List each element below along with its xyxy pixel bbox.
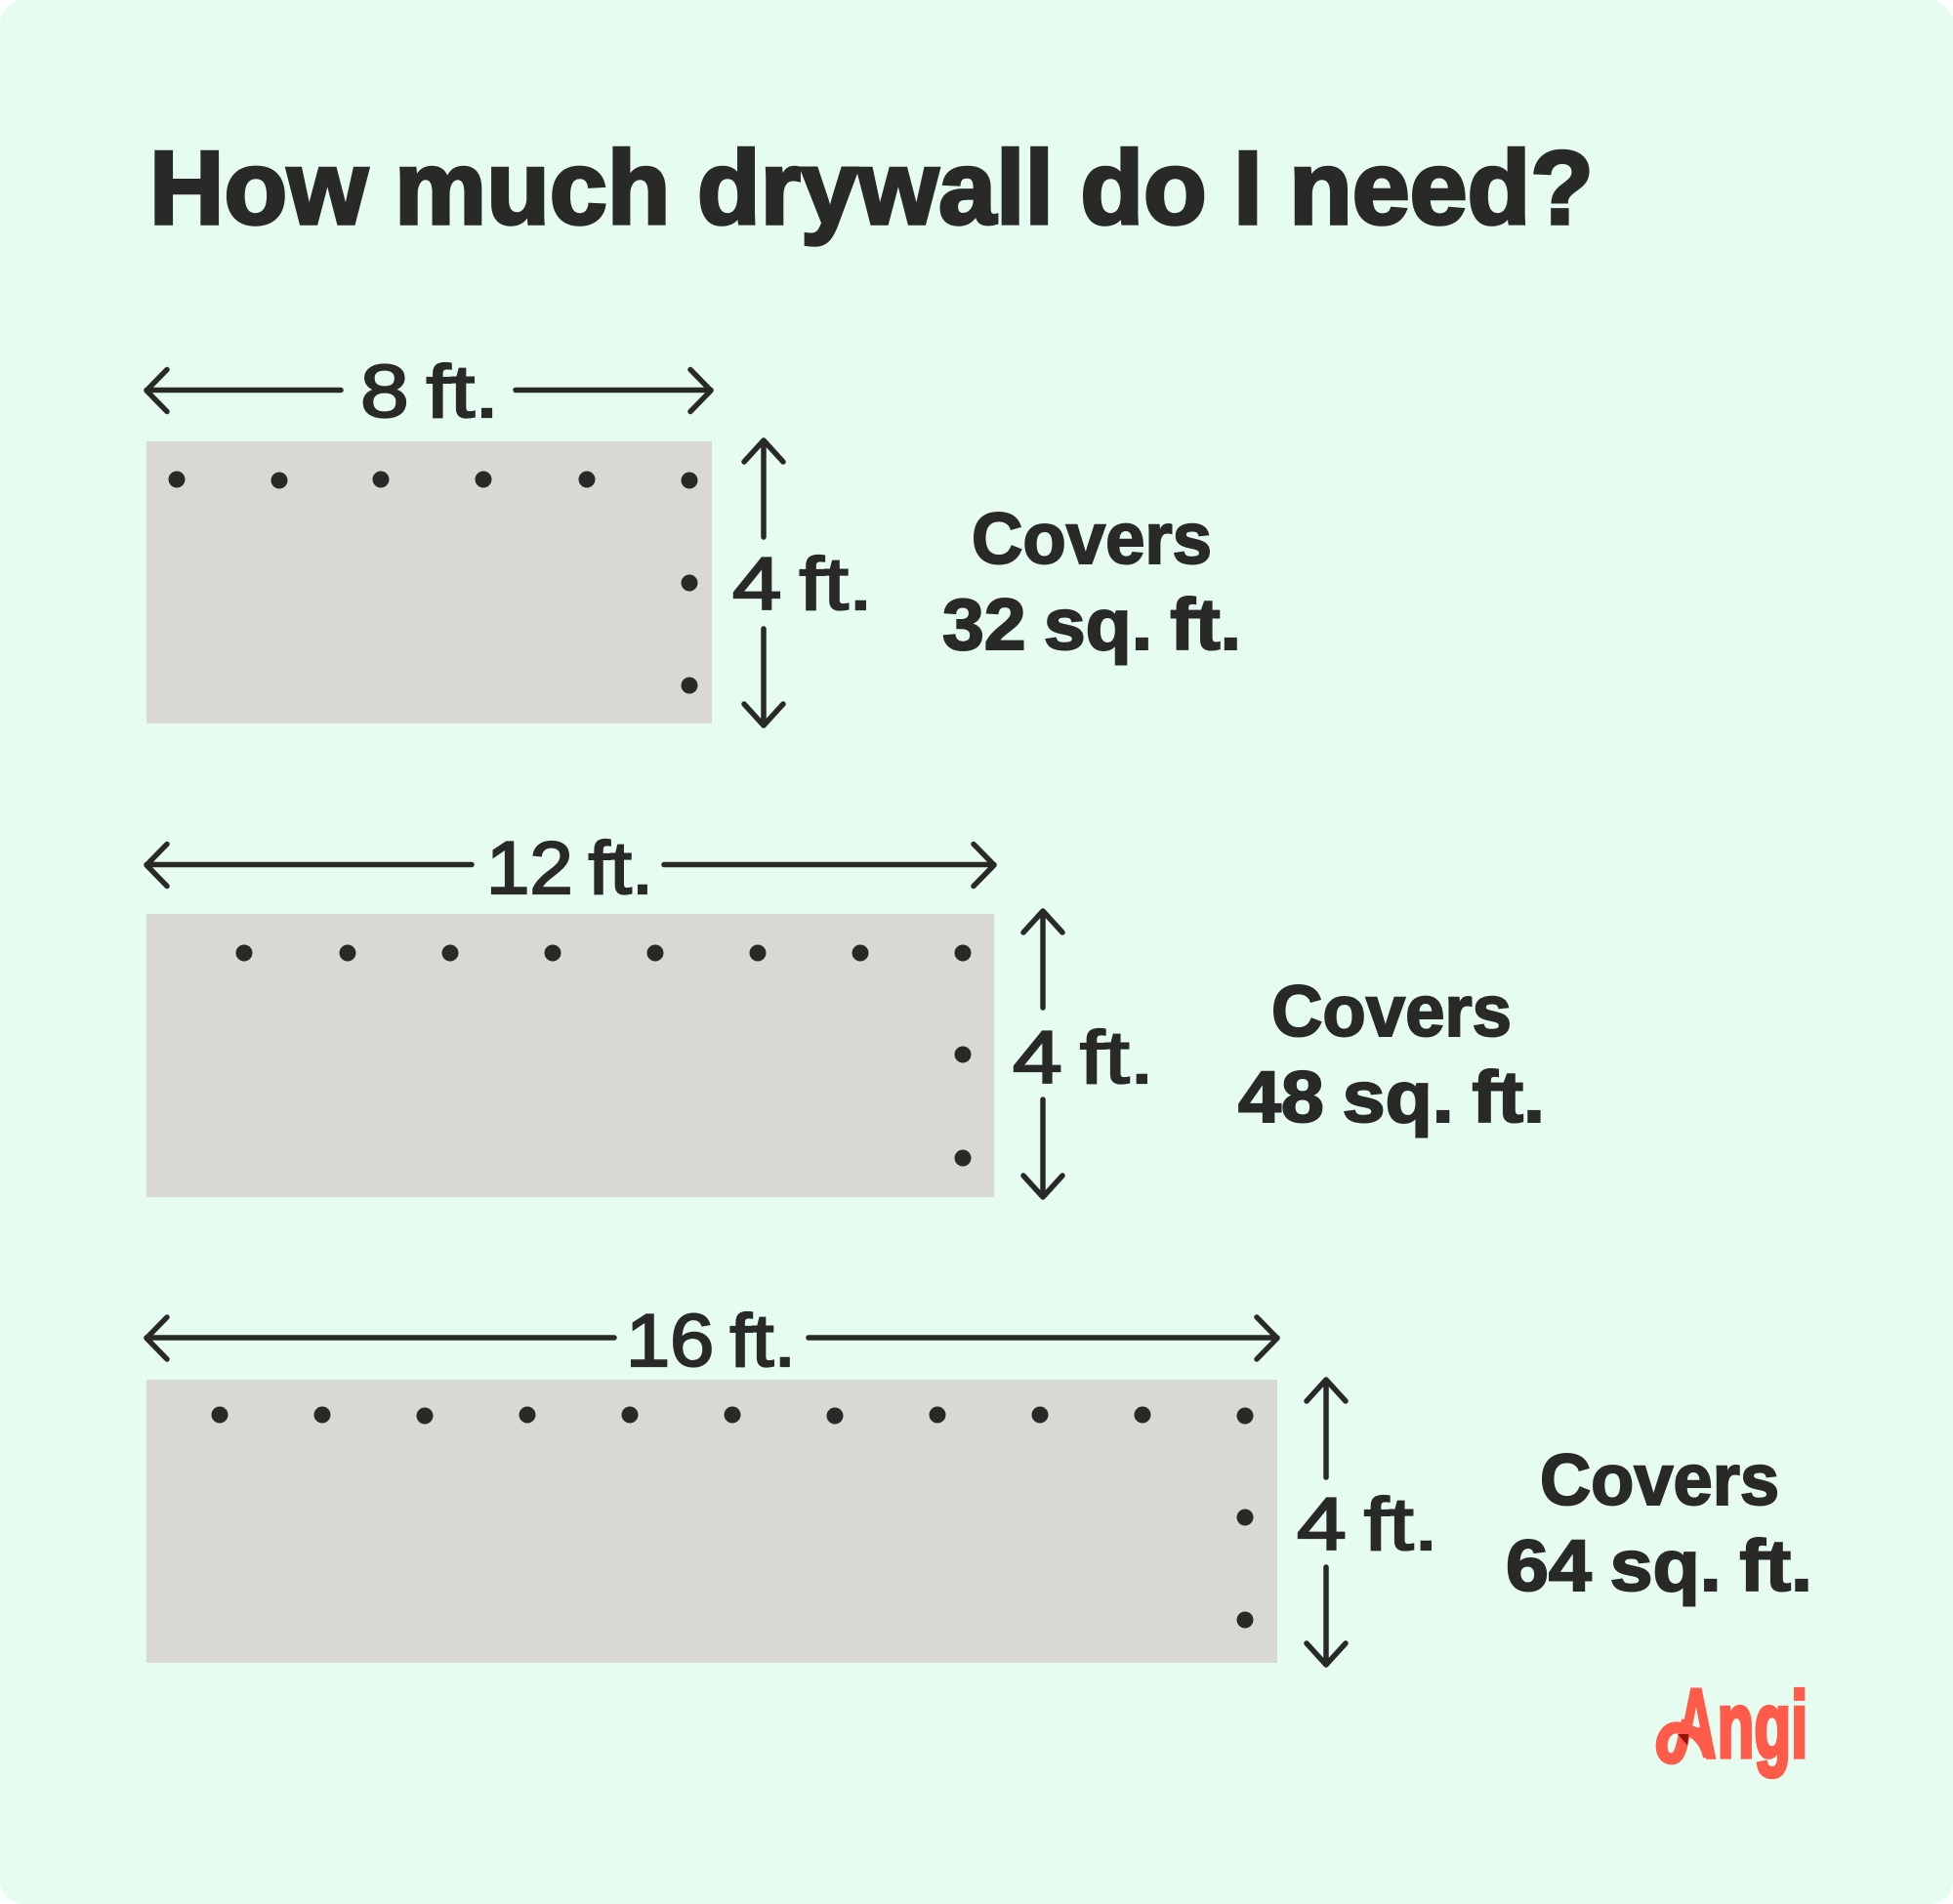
panel: 16 ft sheet row — [146, 1300, 1812, 1665]
coverage label 64 sq. ft.: Covers — [1540, 1439, 1779, 1520]
height arrow 4 ft — [1013, 911, 1154, 1197]
drywall sheet 8 ft — [146, 441, 712, 724]
title: How much drywall do I need? — [149, 129, 1594, 246]
height arrow 4 ft — [732, 440, 873, 725]
coverage label 32 sq. ft.: 32 sq. ft. — [942, 584, 1241, 665]
width arrow 12 ft: 12 ft. — [486, 827, 653, 910]
coverage label 32 sq. ft. — [942, 498, 1241, 665]
icon: Angi logo — [1656, 1687, 1805, 1779]
width arrow 8 ft — [146, 351, 711, 434]
icon: Angi logo: ngi — [1718, 1673, 1808, 1777]
drywall sheet 12 ft — [146, 914, 994, 1197]
height arrow 4 ft — [1297, 1380, 1438, 1665]
coverage label 32 sq. ft.: Covers — [972, 498, 1212, 579]
height arrow 4 ft: 4 ft. — [1013, 1016, 1154, 1099]
coverage label 48 sq. ft.: Covers — [1271, 971, 1512, 1052]
width arrow 12 ft — [146, 827, 994, 910]
coverage label 48 sq. ft.: 48 sq. ft. — [1238, 1056, 1545, 1138]
width arrow 16 ft — [146, 1300, 1277, 1383]
panel: 8 ft sheet row — [146, 351, 1241, 725]
width arrow 8 ft: 8 ft. — [360, 351, 499, 434]
drywall sheet 16 ft — [146, 1380, 1277, 1663]
coverage label 64 sq. ft. — [1506, 1439, 1812, 1606]
coverage label 64 sq. ft.: 64 sq. ft. — [1506, 1525, 1812, 1606]
width arrow 16 ft: 16 ft. — [626, 1300, 796, 1383]
panel: 12 ft sheet row — [146, 827, 1545, 1197]
icon: Angi logo: A — [1677, 1669, 1716, 1778]
height arrow 4 ft: 4 ft. — [732, 543, 873, 626]
coverage label 48 sq. ft. — [1238, 971, 1545, 1138]
height arrow 4 ft: 4 ft. — [1297, 1483, 1438, 1566]
